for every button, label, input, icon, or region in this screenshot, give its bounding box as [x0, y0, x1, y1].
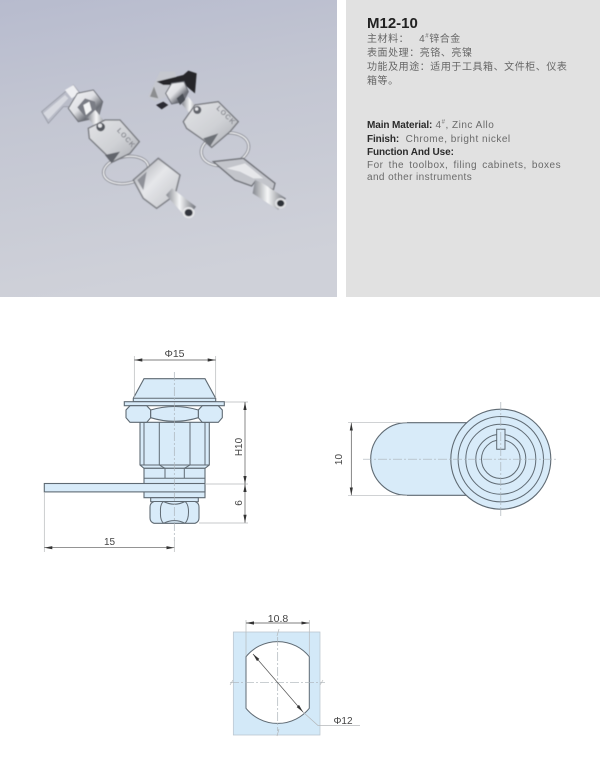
LOCK mark: LOCK — [115, 127, 136, 150]
second key — [213, 158, 275, 190]
dimension: 15 — [44, 537, 174, 548]
English specifications: Finish: Chrome, bright nickel — [367, 134, 511, 145]
second key — [133, 158, 180, 208]
lower nut — [150, 502, 199, 523]
small neck — [151, 498, 198, 502]
left lock and keys — [42, 85, 196, 219]
model number: M12-10 — [367, 15, 418, 32]
dimension: diameter 15 — [134, 348, 216, 360]
dimension: H10: H10 — [234, 437, 245, 456]
key ring — [198, 129, 252, 170]
dimension: 6: 6 — [234, 500, 245, 506]
centre lines — [230, 637, 325, 731]
cam arm — [371, 423, 480, 495]
dimension: diameter 12: Φ12 — [333, 716, 353, 727]
upper hex nut — [126, 406, 222, 422]
English specifications: For the toolbox, filing cabinets, boxes — [367, 160, 561, 171]
key ring — [101, 153, 151, 187]
concentric cylinder rings — [451, 409, 551, 509]
LOCK mark: LOCK — [215, 105, 237, 127]
dimension: 10 — [334, 423, 407, 495]
Chinese specifications — [367, 33, 567, 87]
dimension: 6 — [234, 484, 245, 523]
lower collar — [144, 468, 205, 498]
washer plate — [124, 402, 224, 406]
English specifications: and other instruments — [367, 172, 472, 183]
chrome nut — [68, 90, 103, 122]
first key — [183, 102, 238, 147]
specification panel — [346, 0, 600, 297]
lock head — [148, 72, 178, 102]
panel with hole — [233, 632, 320, 735]
cam arm — [44, 484, 205, 492]
cap — [133, 379, 216, 402]
dimension: diameter 15: Φ15 — [164, 348, 185, 360]
key slot — [497, 429, 505, 449]
shaft — [182, 97, 200, 117]
dimension: H10 — [234, 402, 245, 484]
panel cut-out drawing — [230, 613, 360, 736]
Chinese specifications: 功能及用途：适用于工具箱、文件柜、仪表 — [367, 62, 567, 73]
dimension: 10: 10 — [334, 454, 345, 465]
Chinese specifications: 表面处理：亮铬、亮镍 — [367, 48, 472, 59]
English specifications: Function And Use: — [367, 147, 454, 158]
key tube — [253, 180, 286, 210]
chrome nut — [166, 82, 188, 104]
English specifications: Main Material: 4#, Zinc Allo — [367, 120, 494, 131]
extension lines — [44, 356, 248, 552]
key tube — [166, 188, 196, 219]
handle — [42, 85, 80, 123]
English specifications — [367, 119, 561, 183]
dimension: 10.8: 10.8 — [268, 613, 288, 625]
shaft — [87, 110, 107, 132]
Chinese specifications: 主材料： 4#锌合金 — [367, 34, 461, 45]
centre line — [173, 372, 175, 541]
product photo panel — [0, 0, 337, 297]
side view drawing of the lock — [44, 348, 248, 552]
first key — [88, 120, 139, 162]
right lock and keys — [148, 71, 286, 210]
threaded body — [140, 422, 209, 468]
Chinese specifications: 箱等。 — [367, 76, 399, 87]
front view drawing of the lock — [334, 402, 556, 516]
dimension: 15: 15 — [104, 537, 115, 548]
centre lines — [363, 402, 556, 516]
